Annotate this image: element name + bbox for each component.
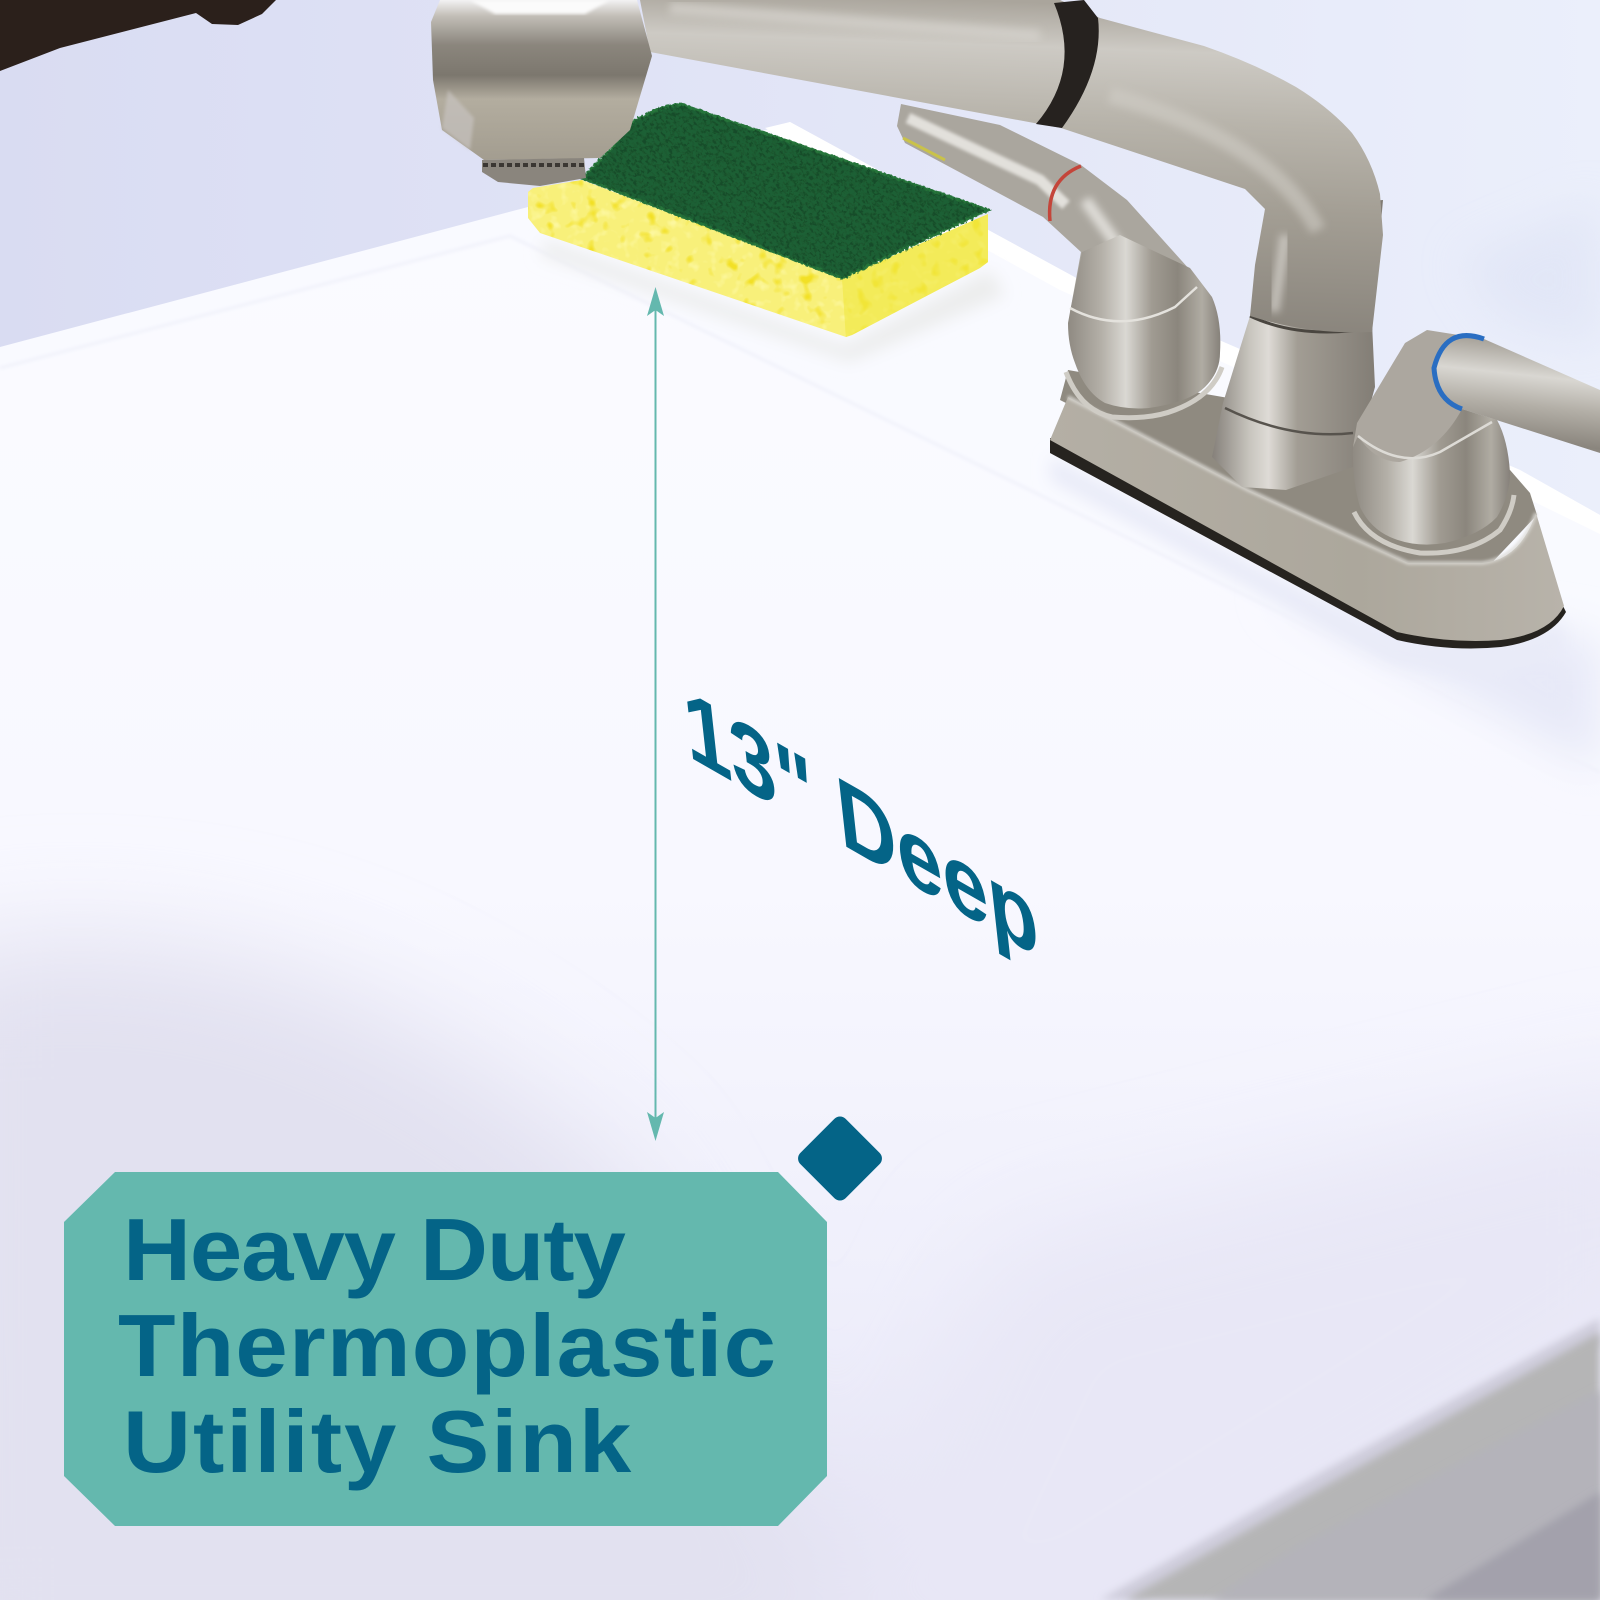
red hot indicator (1050, 166, 1081, 221)
spray head highlight (470, 0, 610, 14)
blue cold indicator (1434, 336, 1484, 409)
spray head left sheen (442, 90, 474, 150)
rim soft transition (1100, 1318, 1600, 1600)
right lever (1434, 336, 1600, 453)
aerator (482, 158, 586, 186)
base plate top surface (1060, 370, 1537, 570)
black ring (1036, 0, 1099, 128)
deck shading near right (1270, 590, 1600, 772)
counter ledge behind deck (765, 122, 1600, 534)
badge background (64, 1172, 827, 1526)
base plate rubber gasket (1050, 438, 1566, 648)
arrow head bottom (647, 1112, 664, 1141)
callout diamond (795, 1113, 885, 1204)
badge heading: Thermoplastic (118, 1298, 776, 1395)
front face (1425, 1492, 1600, 1600)
lever yellow reflection (903, 138, 945, 160)
wall (0, 0, 1600, 515)
dark wood object, top left (0, 0, 276, 71)
column upper highlight (1274, 235, 1285, 312)
left handle seam (1070, 287, 1197, 321)
right handle collar (1354, 495, 1514, 553)
wall shadow beside faucet (1460, 200, 1600, 350)
sink front rim (1100, 1318, 1600, 1600)
dark rim band (1125, 1332, 1600, 1600)
aerator grid (483, 163, 584, 167)
sponge yellow body (528, 180, 988, 337)
mid rim band (1210, 1390, 1600, 1600)
column collar line (1250, 316, 1372, 332)
faucet column (1212, 200, 1383, 490)
sponge (520, 100, 1005, 362)
base plate highlight (1068, 397, 1536, 563)
badge heading: Utility Sink (123, 1394, 632, 1491)
base plate front face (1050, 397, 1564, 641)
badge heading (118, 1202, 776, 1491)
spout pipe (640, 0, 1383, 332)
arrow head top (647, 287, 664, 316)
faucet (431, 0, 1600, 648)
left lever (897, 104, 1197, 312)
callout badge (64, 1172, 827, 1526)
right handle seam (1358, 422, 1492, 458)
label: 13 inches deep: 13" Deep (678, 666, 1044, 980)
depth arrow: 13 inch (647, 287, 664, 1141)
sponge green scrubber (575, 100, 995, 285)
spray head (431, 0, 652, 160)
badge heading: Heavy Duty (123, 1202, 626, 1299)
basin lower shading (0, 926, 1600, 1454)
right handle dome (1353, 409, 1510, 545)
column lower collar line (1225, 408, 1353, 434)
left handle dome (1068, 235, 1220, 408)
sponge side face (842, 214, 988, 340)
left handle collar (1066, 367, 1222, 418)
right handle upper (1353, 330, 1500, 470)
gasket shadow on deck (1050, 456, 1564, 680)
sponge shadow (540, 240, 1005, 362)
sink deck (0, 128, 1600, 772)
basin back edge (0, 236, 1600, 772)
spout highlight (670, 8, 1040, 36)
